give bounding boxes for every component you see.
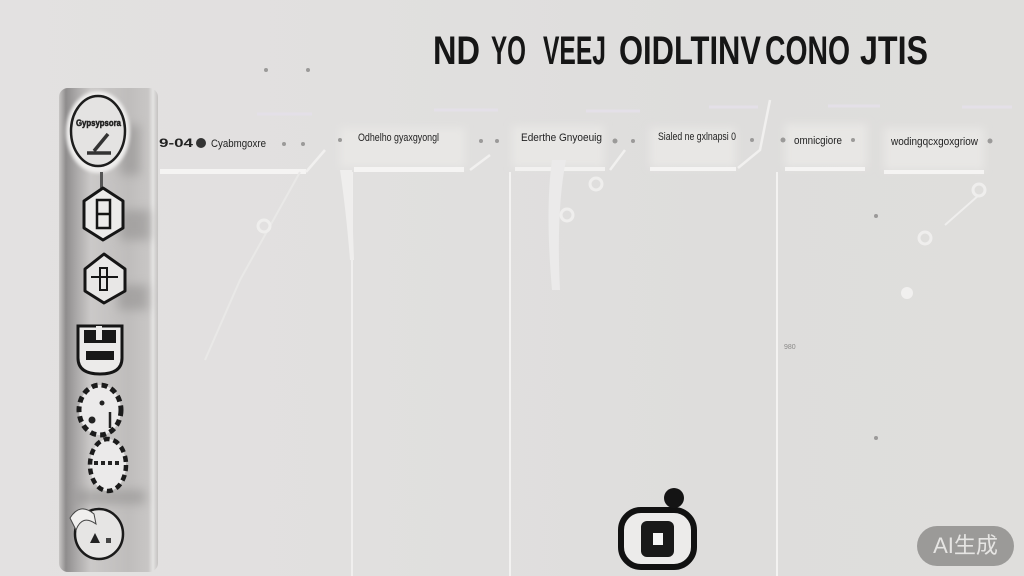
column heading 3: Ederthe Gnyoeuig [521, 132, 602, 144]
title [433, 29, 928, 73]
icon: fifth badge [79, 385, 121, 435]
small marks [264, 68, 992, 440]
icon: top badge [66, 91, 130, 173]
title: CONO [765, 29, 850, 73]
icon: third badge [85, 254, 125, 303]
icon: fourth badge [78, 326, 122, 374]
AI badge [917, 526, 1014, 566]
panel: icon rail [59, 88, 158, 572]
icon: second badge [84, 172, 123, 240]
column heading 5: omnicgiore [794, 135, 842, 147]
column tabs [257, 106, 1012, 114]
icon: bottom camera badge [621, 488, 694, 567]
title: YO [491, 29, 526, 73]
title: OIDLTINV [619, 29, 761, 73]
icon: top badge: Gypsypsora [76, 118, 122, 128]
column heading 1: Cyabmgoxre [211, 138, 266, 150]
column heading 1 [159, 136, 266, 150]
AI badge: AI生成 [933, 533, 998, 558]
column heading 1: 9-04 [159, 136, 193, 150]
title: ND [433, 29, 480, 73]
column rule lines [160, 100, 985, 576]
small axis label: 980 [784, 344, 796, 351]
heading backdrop patches [340, 124, 984, 170]
title: VEEJ [543, 29, 606, 73]
column heading 6: wodingqcxgoxgriow [890, 136, 978, 148]
column heading 4: Sialed ne gxlnapsi 0 [658, 131, 736, 143]
icon: sixth badge [90, 439, 126, 491]
title: JTIS [860, 29, 928, 73]
icon: seventh badge [70, 509, 123, 559]
column heading 2: Odhelho gyaxgyongl [358, 132, 439, 144]
